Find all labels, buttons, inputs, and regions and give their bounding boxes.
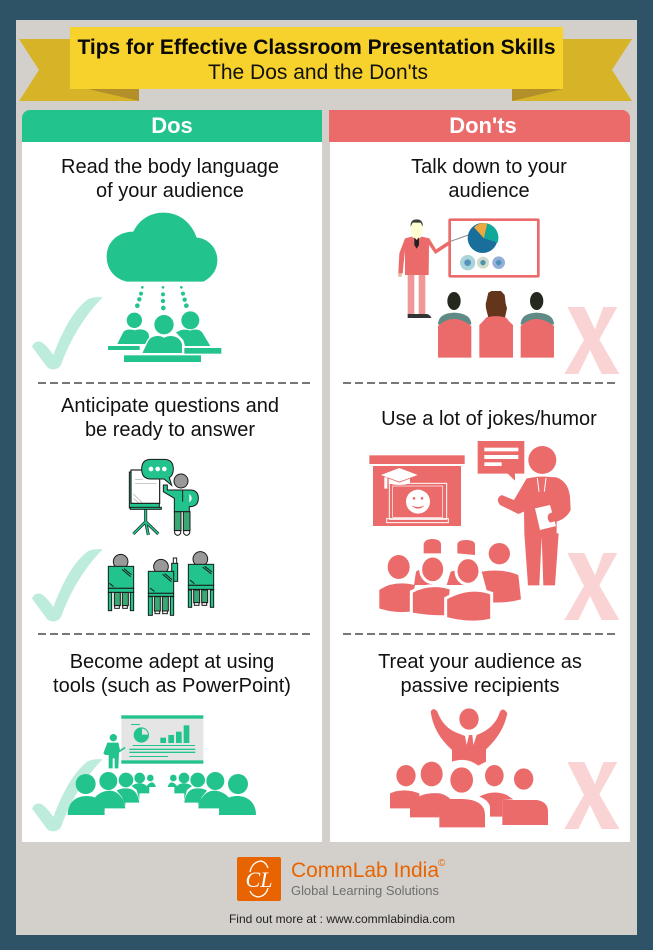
presentation board xyxy=(450,220,538,276)
text: don't 3: passive recipients xyxy=(401,675,559,697)
text: don't 2: Use a lot of jokes/humor xyxy=(381,408,597,430)
audience member xyxy=(479,291,513,358)
icon: presenter with slide and audience xyxy=(68,715,256,815)
speech bubble xyxy=(478,441,524,481)
audience xyxy=(390,762,548,827)
icon: cloud and audience xyxy=(107,213,221,362)
icon: check mark 2 xyxy=(32,549,103,621)
logo tagline: Global Learning Solutions xyxy=(291,883,440,898)
divider xyxy=(343,382,615,384)
text: tip 3: tools (such as PowerPoint) xyxy=(53,675,291,697)
slide xyxy=(121,715,203,764)
icon: x mark 1 xyxy=(564,307,619,374)
icon: x mark 2 xyxy=(564,553,619,620)
icon: check mark 3 xyxy=(32,759,103,831)
footer xyxy=(229,857,455,926)
screen with smiley xyxy=(369,455,465,526)
presenter arms raised xyxy=(431,708,507,766)
presenter xyxy=(398,219,451,318)
icon: x mark 3 xyxy=(564,762,619,829)
logo mark: CL xyxy=(246,867,272,892)
logo mark xyxy=(237,857,281,901)
text: don't 3: Treat your audience as xyxy=(378,651,582,673)
audience right xyxy=(168,772,256,815)
heading: dos xyxy=(22,110,322,142)
icon: presenter talking down to audience xyxy=(398,219,554,358)
student: left xyxy=(108,554,134,611)
heading: dos: Dos xyxy=(151,113,193,138)
text: tip 2: Anticipate questions and xyxy=(61,395,279,417)
icon: seated students xyxy=(108,552,214,615)
student: right xyxy=(188,552,214,607)
audience xyxy=(379,539,521,622)
logo name: CommLab India xyxy=(291,859,439,882)
presenter xyxy=(498,446,571,585)
divider xyxy=(343,633,615,635)
panel: dos xyxy=(22,110,322,842)
footer link: Find out more at : www.commlabindia.com xyxy=(229,912,455,926)
icon: presenter at flipchart xyxy=(129,459,198,535)
panel: don'ts xyxy=(329,110,630,842)
text: don't 1: Talk down to your xyxy=(411,156,567,178)
title banner xyxy=(19,27,632,101)
student: raised hand xyxy=(148,558,178,615)
text: tip 1: of your audience xyxy=(96,180,244,202)
icon: presenter with passive audience xyxy=(390,708,548,827)
audience member xyxy=(438,292,471,358)
title: Tips for Effective Classroom Presentation Skills xyxy=(77,36,556,59)
audience left xyxy=(68,772,156,815)
heading: don'ts: Don'ts xyxy=(449,113,517,138)
copyright mark: © xyxy=(438,858,446,869)
audience member xyxy=(521,292,554,358)
presenter xyxy=(103,734,125,768)
icon: check mark 1 xyxy=(32,297,103,369)
heading: don'ts xyxy=(329,110,630,142)
divider xyxy=(38,633,310,635)
text: tip 2: be ready to answer xyxy=(85,419,255,441)
divider xyxy=(38,382,310,384)
text: don't 1: audience xyxy=(448,180,530,202)
subtitle: The Dos and the Don'ts xyxy=(208,61,428,84)
icon: presenter with jokes and audience xyxy=(369,441,571,622)
text: tip 1: Read the body language xyxy=(61,156,279,178)
text: tip 3: Become adept at using xyxy=(70,651,274,673)
